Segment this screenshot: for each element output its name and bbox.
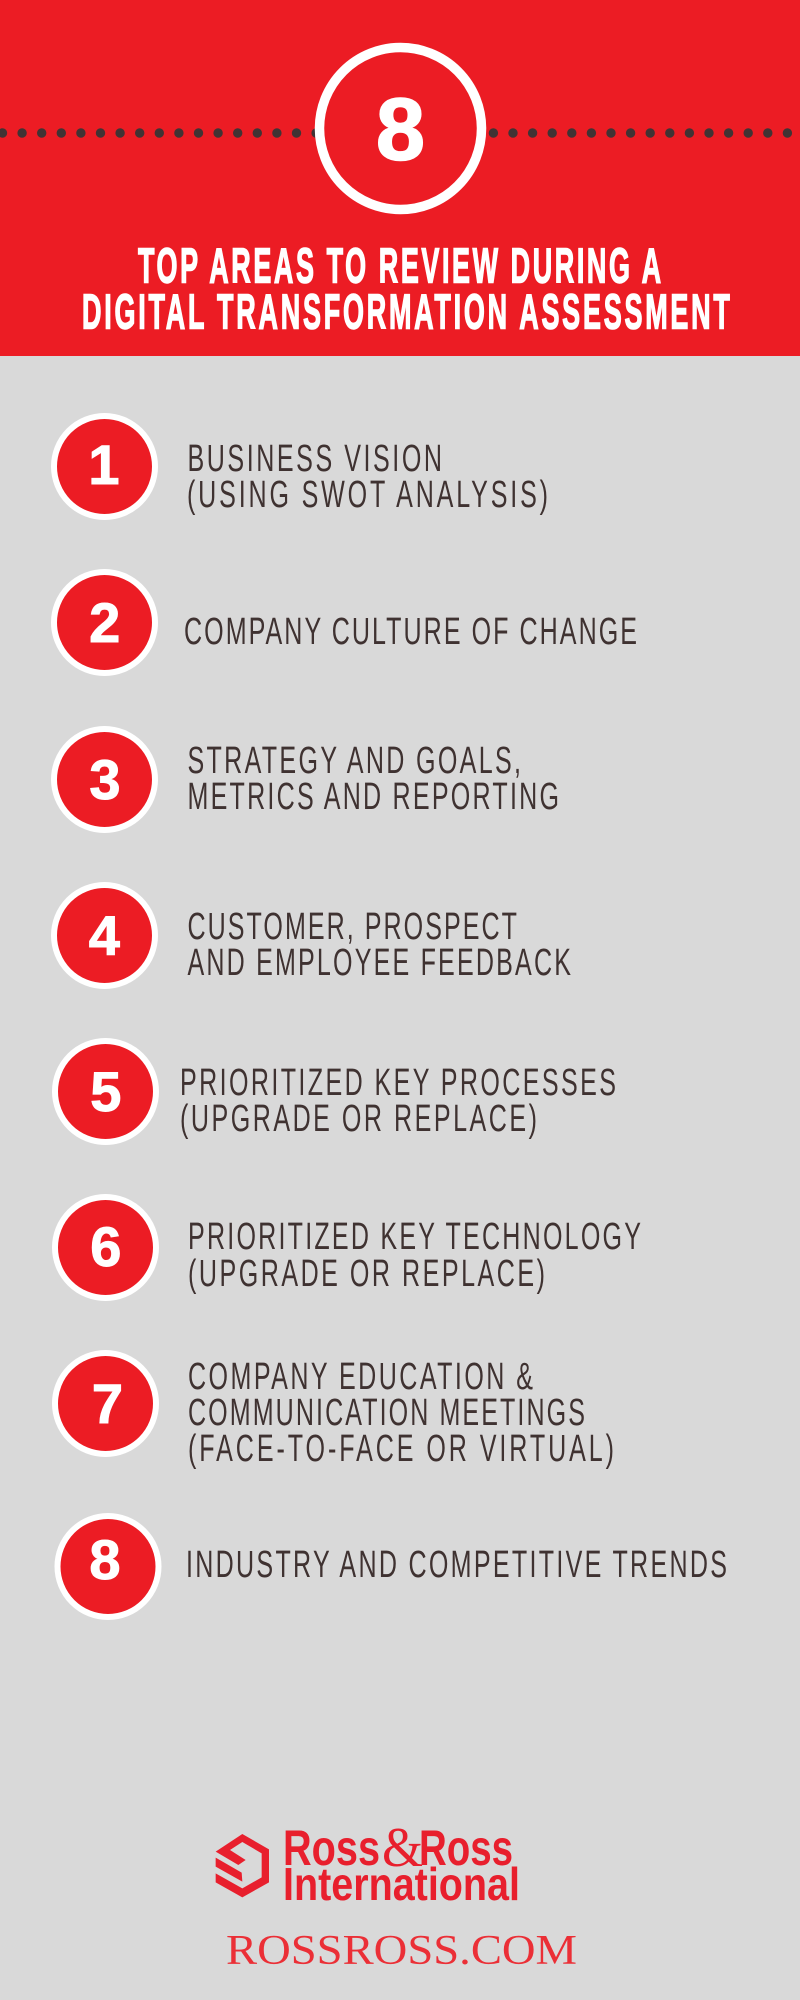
item 5: [55, 1041, 616, 1142]
item 7: [55, 1353, 614, 1469]
big number circle: 8: [376, 80, 425, 178]
item 6: 6: [90, 1215, 121, 1278]
item 6: [55, 1197, 641, 1298]
item 8: [58, 1516, 727, 1617]
item 1: [54, 416, 548, 517]
item 3: 3: [89, 748, 121, 811]
item 7: COMPANY EDUCATION &: [188, 1355, 533, 1397]
item 5: PRIORITIZED KEY PROCESSES: [180, 1061, 616, 1103]
panel: red header: [0, 0, 800, 356]
item 6: PRIORITIZED KEY TECHNOLOGY: [188, 1215, 641, 1257]
item 8: INDUSTRY AND COMPETITIVE TRENDS: [186, 1543, 727, 1585]
item 6: (UPGRADE OR REPLACE): [188, 1252, 545, 1294]
big number circle: [320, 48, 482, 210]
logo wordmark: [283, 1817, 520, 1910]
logo wordmark: &: [382, 1817, 423, 1879]
website url: ROSSROSS.COM: [226, 1928, 577, 1974]
item 4: [54, 885, 571, 986]
item 4: AND EMPLOYEE FEEDBACK: [188, 941, 571, 983]
item 4: CUSTOMER, PROSPECT: [188, 905, 517, 947]
item 3: METRICS AND REPORTING: [188, 775, 559, 817]
item 2: 2: [89, 591, 120, 654]
item 5: 5: [90, 1060, 121, 1123]
logo: Ross & Ross International: [216, 1817, 520, 1910]
item 7: 7: [92, 1372, 123, 1435]
item 1: 1: [88, 433, 120, 496]
title: DIGITAL TRANSFORMATION ASSESSMENT: [82, 285, 730, 340]
item 2: [54, 572, 637, 673]
title: TOP AREAS TO REVIEW DURING A: [138, 239, 661, 294]
item 3: STRATEGY AND GOALS,: [188, 739, 521, 781]
item 5: (UPGRADE OR REPLACE): [180, 1097, 537, 1139]
item 3: [54, 729, 559, 830]
item 7: COMMUNICATION MEETINGS: [188, 1391, 585, 1433]
logo wordmark: Ross: [283, 1820, 380, 1876]
item 8: 8: [89, 1528, 121, 1591]
title: [82, 239, 730, 340]
item 1: BUSINESS VISION: [188, 437, 442, 479]
icon: hexagon logo mark: [216, 1834, 269, 1897]
item 4: 4: [89, 904, 120, 967]
logo wordmark: Ross: [419, 1820, 513, 1876]
logo wordmark: International: [283, 1858, 520, 1910]
item 1: (USING SWOT ANALYSIS): [187, 473, 548, 515]
item 2: COMPANY CULTURE OF CHANGE: [184, 610, 637, 652]
item 7: (FACE-TO-FACE OR VIRTUAL): [188, 1427, 614, 1469]
